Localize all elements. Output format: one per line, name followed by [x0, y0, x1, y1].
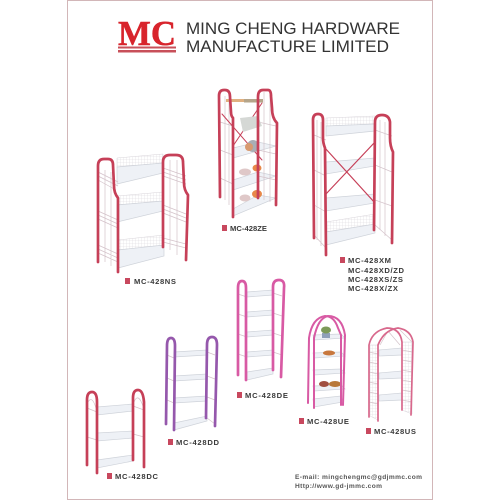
label: MC-428XM series: MC-428XS/ZS — [348, 275, 403, 284]
rack: MC-428UE — [308, 316, 345, 408]
contact details — [295, 474, 422, 490]
rack: MC-428NS — [98, 154, 188, 272]
header — [118, 14, 400, 56]
rack: MC-428DE — [238, 280, 284, 380]
rack: MC-428XM — [313, 114, 393, 255]
page frame — [68, 0, 432, 500]
rack: MC-428ZE — [219, 90, 277, 217]
contact details: E-mail: mingchengmc@gdjmmc.com — [295, 474, 422, 481]
rack: MC-428US — [369, 328, 413, 421]
label: MC-428XM series: MC-428X/ZX — [348, 284, 398, 293]
header: MANUFACTURE LIMITED — [186, 38, 389, 56]
label: MC-428DE: MC-428DE — [245, 391, 288, 400]
contact details: Http://www.gd-jmmc.com — [295, 483, 382, 490]
label: MC-428UE: MC-428UE — [307, 417, 349, 426]
rack: MC-428DC — [87, 390, 144, 473]
company name: MING CHENG HARDWARE — [186, 20, 400, 38]
label: MC-428XM series — [340, 256, 405, 293]
shelf items — [226, 99, 263, 202]
label: MC-428XM series: MC-428XM — [348, 256, 391, 265]
label: MC-428US: MC-428US — [374, 427, 416, 436]
rack: MC-428DD — [166, 337, 217, 430]
label: MC-428ZE: MC-428ZE — [230, 224, 267, 233]
logo: MC: MC — [118, 14, 176, 53]
label: MC-428DC: MC-428DC — [115, 472, 159, 481]
label: MC-428NS: MC-428NS — [134, 277, 176, 286]
label: MC-428DD: MC-428DD — [176, 438, 220, 447]
shelf items — [319, 326, 341, 387]
label: MC-428XM series: MC-428XD/ZD — [348, 266, 405, 275]
